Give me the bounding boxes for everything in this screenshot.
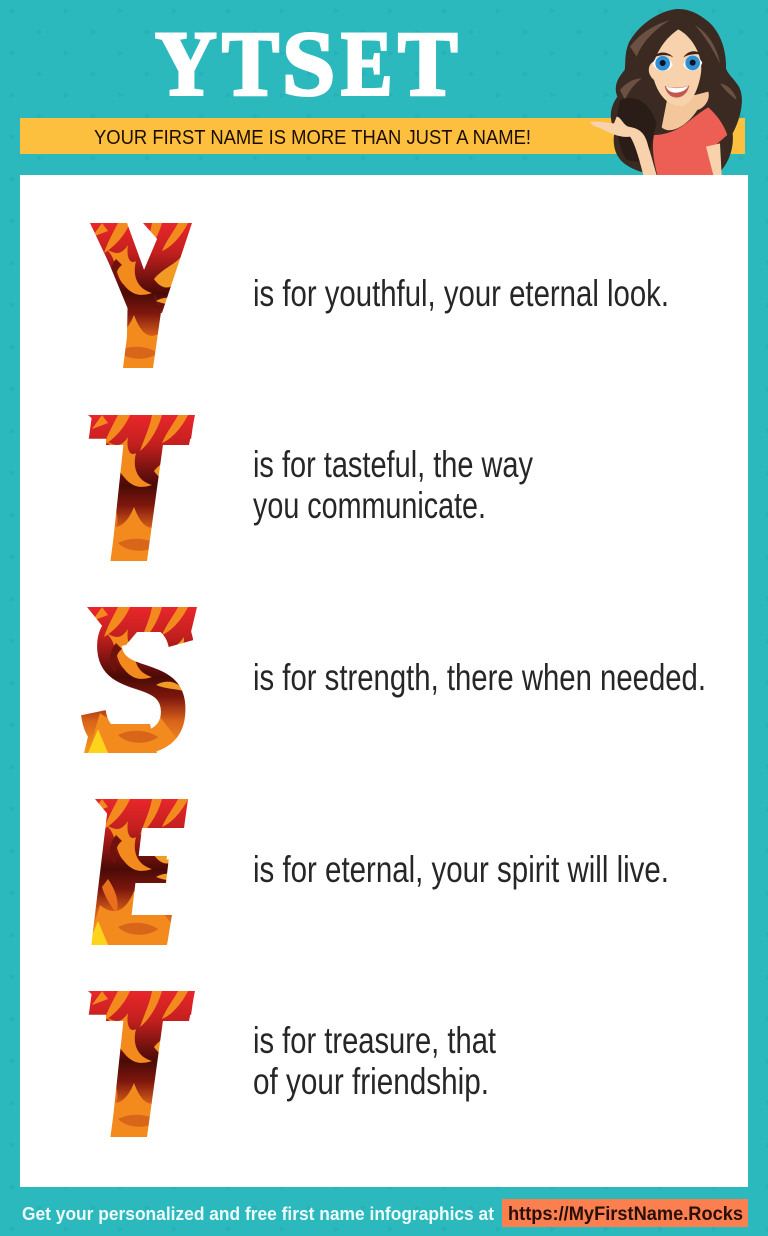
- title: S: [282, 13, 335, 115]
- banner: [20, 118, 745, 154]
- icon: fire letter T second: [88, 991, 195, 1137]
- text: Y line: is for youthful, your eternal look.: [253, 273, 669, 314]
- title: Y: [155, 14, 217, 115]
- footer text: Get your personalized and free first name infographics at: [22, 1204, 494, 1224]
- neck and chest: [662, 92, 709, 130]
- footer url badge: https://MyFirstName.Rocks: [508, 1204, 743, 1225]
- banner: YOUR FIRST NAME IS MORE THAN JUST A NAME!: [94, 127, 531, 149]
- icon: fire letter E: [91, 799, 188, 945]
- text: T line second: of your friendship.: [253, 1061, 489, 1102]
- shirt: [653, 107, 727, 175]
- title: [155, 12, 458, 115]
- icon: fire letter Y: [90, 223, 192, 368]
- icon: fire letter S: [81, 607, 197, 753]
- eyes: [652, 51, 702, 71]
- text: E line: is for eternal, your spirit will live.: [253, 849, 669, 890]
- icon: cartoon woman: [590, 9, 742, 175]
- icon: fire letter T: [88, 415, 195, 561]
- arm and hand: [590, 117, 657, 175]
- title: E: [341, 13, 393, 115]
- text: T line second: is for treasure, that: [253, 1020, 497, 1061]
- title: T: [398, 12, 458, 115]
- mouth: [665, 85, 689, 97]
- panel: white content: [20, 175, 748, 1187]
- text: T line: is for tasteful, the way: [253, 444, 533, 485]
- text: T line: you communicate.: [253, 485, 486, 526]
- title: T: [222, 14, 279, 115]
